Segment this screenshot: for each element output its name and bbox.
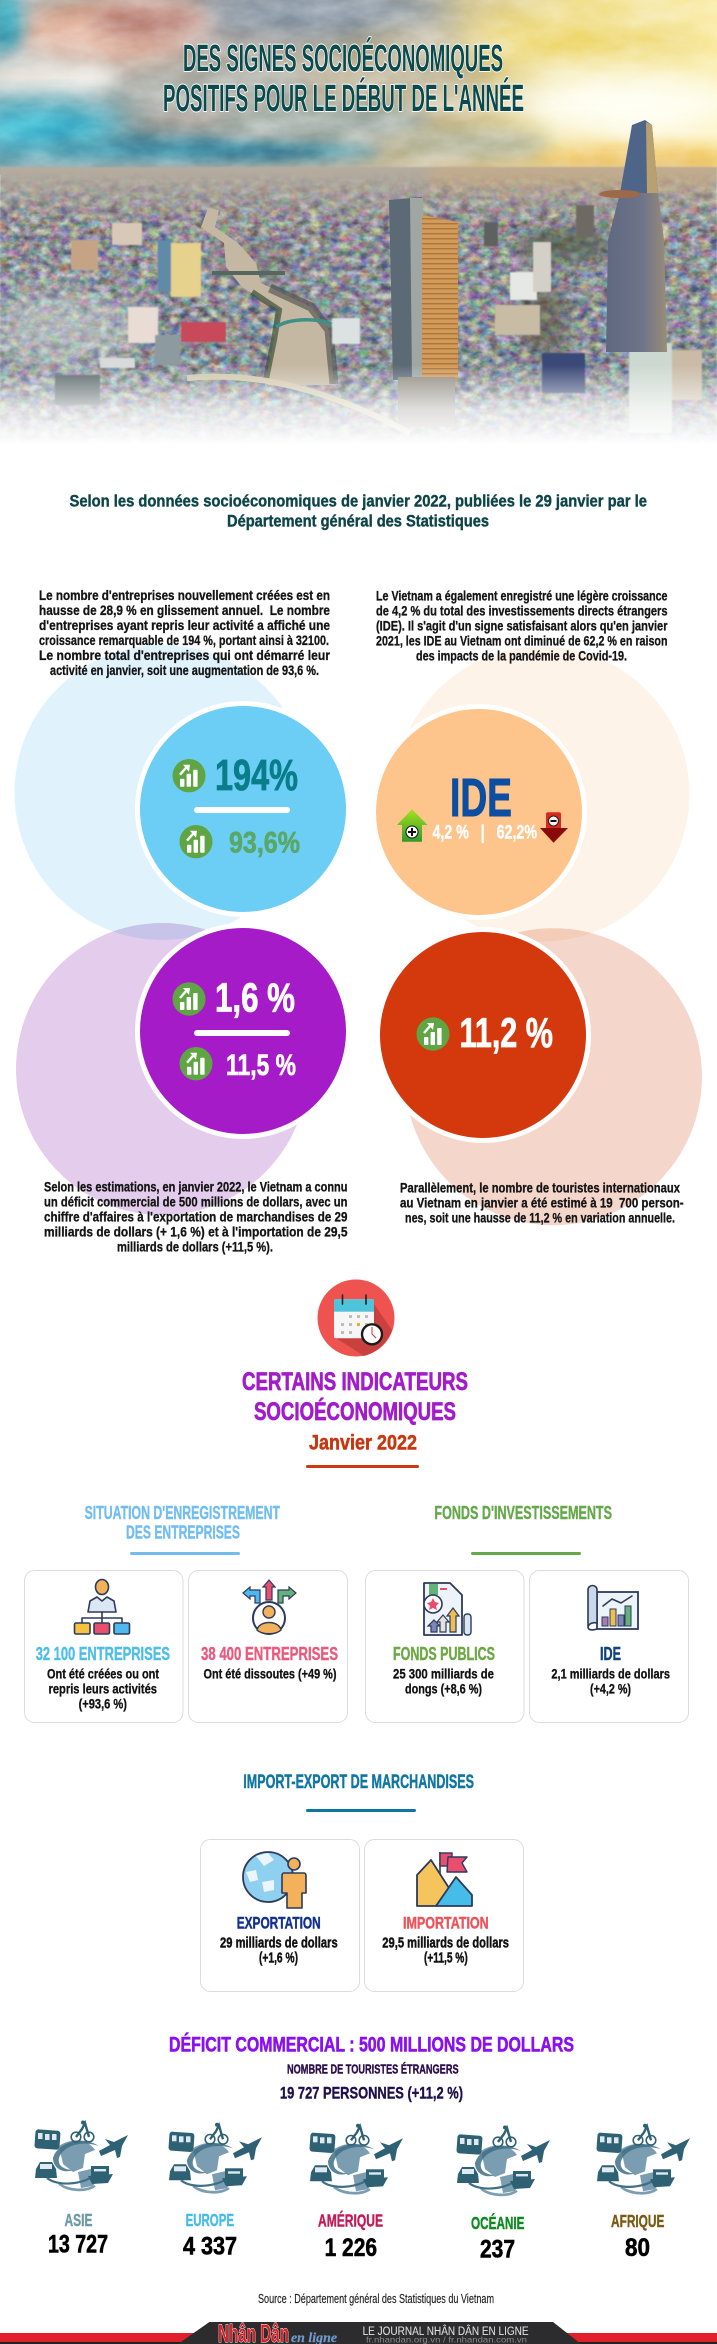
- card: FDI: (+4,2 %): [590, 1682, 631, 1697]
- icon: calendar and clock: [318, 1280, 394, 1356]
- intro text: Département général des Statistiques: [227, 512, 489, 531]
- paragraph: trade deficit: milliards de dollars (+11,5 %).: [117, 1240, 273, 1255]
- heading: trade deficit and tourists: [169, 2033, 574, 2102]
- card: public funds: 25 300 milliards de: [393, 1667, 494, 1682]
- tourists: Africa: 80: [625, 2234, 650, 2262]
- tourists: Asia: 13 727: [48, 2230, 108, 2258]
- card: public funds: dongs (+8,6 %): [405, 1682, 482, 1697]
- card: public funds: FONDS PUBLICS: [393, 1644, 495, 1664]
- central tower: [389, 197, 422, 380]
- heading: import-export: [243, 1772, 474, 1812]
- circle: IDE: [374, 706, 584, 918]
- card: 32 100 enterprises: [24, 1570, 183, 1722]
- river: [201, 208, 334, 385]
- card: 32 100 enterprises: repris leurs activités: [48, 1682, 157, 1697]
- heading: certain indicators: Janvier 2022: [309, 1431, 417, 1454]
- heading: trade deficit and tourists: 19 727 PERSONNES (+11,2 %): [280, 2083, 463, 2102]
- card: 32 100 enterprises: Ont été créées ou ont: [47, 1667, 159, 1682]
- circle: trade 1.6% / 11.5%: 11,5 %: [226, 1049, 296, 1082]
- heading: certain indicators: [242, 1368, 468, 1468]
- card: FDI: IDE: [600, 1644, 621, 1664]
- tourists: Oceania: 237: [480, 2236, 515, 2264]
- heading: trade deficit and tourists: DÉFICIT COMMERCIAL : 500 MILLIONS DE DOLLARS: [169, 2033, 574, 2056]
- paragraph: new enterprises: d'entreprises ayant repris leur activité a affiché une: [39, 618, 330, 633]
- intro text: [70, 492, 647, 531]
- tourists: America: AMÉRIQUE: [318, 2210, 383, 2231]
- paragraph: tourists: [400, 1181, 684, 1226]
- tourists: Africa: AFRIQUE: [611, 2211, 664, 2231]
- footer banner: LE JOURNAL NHÂN DÂN EN LIGNE: [363, 2325, 529, 2338]
- icon: organisation chart: [74, 1580, 130, 1634]
- white fade at the bottom of the photo: [0, 365, 717, 445]
- paragraph: new enterprises: Le nombre d'entreprises nouvellement créées est en: [39, 588, 330, 603]
- heading: enterprise registration: DES ENTREPRISES: [126, 1523, 240, 1543]
- circle: tourists 11.2%: 11,2 %: [460, 1009, 553, 1056]
- circle: enterprises 194% / 93.6%: 93,6%: [229, 827, 300, 860]
- heading: certain indicators: CERTAINS INDICATEURS: [242, 1368, 468, 1396]
- icon: globe and person: [243, 1852, 306, 1908]
- icon: growth chart: [416, 1017, 450, 1051]
- icon: financial document: [424, 1583, 471, 1635]
- icon: chart on scroll: [588, 1586, 638, 1630]
- paragraph: trade deficit: un déficit commercial de 500 millions de dollars, avec un: [44, 1195, 348, 1210]
- intro text: Selon les données socioéconomiques de janvier 2022, publiées le 29 janvier par le: [70, 492, 647, 511]
- paragraph: trade deficit: [44, 1180, 348, 1255]
- paragraph: FDI: des impacts de la pandémie de Covid-19.: [416, 649, 627, 664]
- circle: IDE: IDE: [450, 768, 512, 828]
- card: imports: (+11,5 %): [424, 1951, 468, 1967]
- card: imports: IMPORTATION: [403, 1914, 489, 1933]
- source line: Source : Département général des Statistiques du Vietnam: [258, 2292, 494, 2306]
- paragraph: trade deficit: milliards de dollars (+ 1,6 %) et à l'importation de 29,5: [44, 1225, 348, 1240]
- card: 38 400 enterprises: [188, 1570, 348, 1722]
- card: exports: [200, 1840, 360, 1992]
- background buildings: [55, 205, 702, 433]
- card: FDI: 2,1 milliards de dollars: [551, 1667, 670, 1682]
- paragraph: new enterprises: Le nombre total d'entreprises qui ont démarré leur: [39, 648, 331, 663]
- card: exports: EXPORTATION: [237, 1914, 321, 1933]
- heading: trade deficit and tourists: NOMBRE DE TOURISTES ÉTRANGERS: [287, 2062, 459, 2077]
- heading: certain indicators: SOCIOÉCONOMIQUES: [254, 1397, 456, 1426]
- card: 38 400 enterprises: 38 400 ENTREPRISES: [201, 1644, 338, 1664]
- tourists: Oceania: [456, 2126, 550, 2264]
- card: imports: 29,5 milliards de dollars: [382, 1936, 509, 1952]
- card: exports: (+1,6 %): [259, 1951, 298, 1967]
- elevated road: [187, 377, 410, 433]
- tourists: Asia: [34, 2120, 128, 2258]
- card: 38 400 enterprises: Ont été dissoutes (+49 %): [204, 1667, 336, 1682]
- Bitexco tower: [620, 120, 658, 193]
- circle: IDE: 4,2 % | 62,2%: [432, 822, 537, 843]
- card: exports: 29 milliards de dollars: [220, 1936, 338, 1952]
- card: 32 100 enterprises: 32 100 ENTREPRISES: [36, 1644, 170, 1664]
- icon: mountains and flag: [417, 1852, 472, 1906]
- heading: enterprise registration: SITUATION D'ENREGISTREMENT: [85, 1503, 280, 1523]
- tourists: Asia: ASIE: [64, 2210, 92, 2230]
- icon: person with diverging arrows: [243, 1580, 296, 1634]
- tourists: America: [309, 2124, 403, 2262]
- footer banner: [0, 2320, 717, 2344]
- circle: trade 1.6% / 11.5%: 1,6 %: [215, 975, 295, 1021]
- tourists: Europe: 4 337: [183, 2232, 237, 2260]
- hero photo: Ho Chi Minh City skyline: [0, 0, 717, 450]
- card: FDI: [530, 1570, 688, 1722]
- paragraph: FDI: [376, 589, 668, 664]
- icon: growth chart: [172, 759, 206, 792]
- icon: green up arrow: [397, 809, 428, 842]
- circle: trade 1.6% / 11.5%: [138, 926, 348, 1136]
- paragraph: new enterprises: activité en janvier, soit une augmentation de 93,6 %.: [50, 663, 319, 678]
- card: 32 100 enterprises: (+93,6 %): [79, 1697, 127, 1712]
- circle: tourists 11.2%: [378, 930, 588, 1140]
- tourists: Europe: EUROPE: [186, 2210, 234, 2230]
- circle: enterprises 194% / 93.6%: [138, 704, 348, 914]
- paragraph: new enterprises: croissance remarquable de 194 %, portant ainsi à 32100.: [39, 633, 329, 648]
- heading: enterprise registration: [85, 1503, 280, 1555]
- card: public funds: [366, 1570, 524, 1722]
- paragraph: trade deficit: Selon les estimations, en janvier 2022, le Vietnam a connu: [44, 1180, 348, 1195]
- circle: enterprises 194% / 93.6%: 194%: [215, 751, 298, 800]
- paragraph: new enterprises: [39, 588, 331, 678]
- heading: investment funds: [434, 1503, 612, 1555]
- icon: growth chart: [172, 982, 206, 1016]
- title: [163, 36, 524, 120]
- tourists: Oceania: OCÉANIE: [471, 2212, 524, 2233]
- paragraph: trade deficit: chiffre d'affaires à l'exportation de marchandises de 29: [44, 1210, 348, 1225]
- tourists: America: 1 226: [325, 2234, 377, 2262]
- card: imports: [364, 1840, 524, 1992]
- paragraph: new enterprises: hausse de 28,9 % en glissement annuel. Le nombre: [39, 603, 330, 618]
- heading: investment funds: FONDS D'INVESTISSEMENTS: [434, 1503, 612, 1523]
- background circles: [14, 645, 690, 942]
- icon: red down arrow: [540, 812, 568, 843]
- tourists: Europe: [168, 2123, 262, 2260]
- tourists: Africa: [596, 2124, 690, 2262]
- heading: import-export: IMPORT-EXPORT DE MARCHANDISES: [243, 1772, 474, 1793]
